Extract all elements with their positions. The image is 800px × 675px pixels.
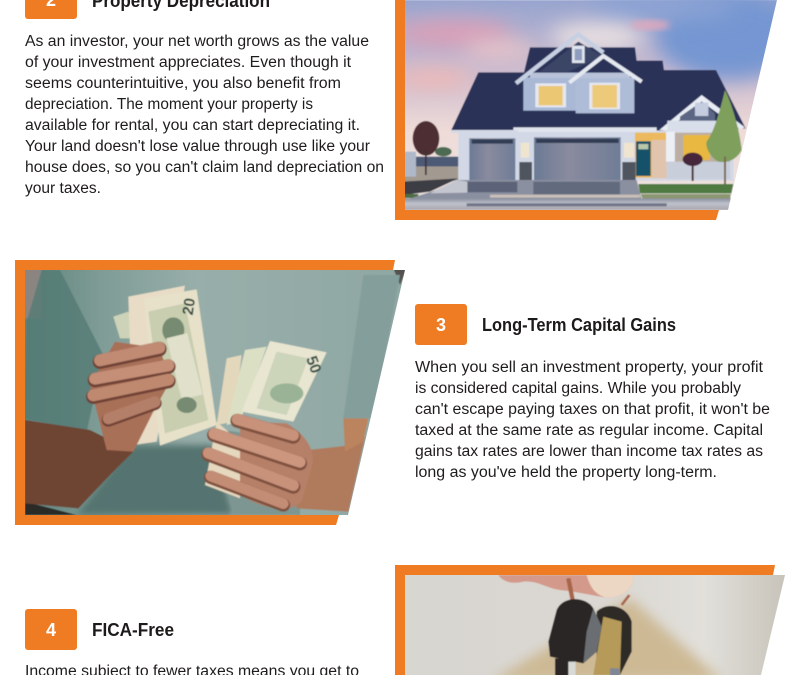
photo: man counting dollar bills: 20: [180, 297, 199, 316]
body text: property depreciation: house does, so you can't claim land depreciation on: [25, 159, 384, 176]
number badge 4: [25, 609, 77, 650]
body text: capital gains: long as you've held the property long-term.: [415, 464, 717, 481]
orange frame: cash photo: [15, 260, 395, 525]
body text: property depreciation: of your investment appreciates. Even though it: [25, 54, 352, 71]
body text: property depreciation: Your land doesn't lose value through use like your: [25, 138, 370, 155]
body text: capital gains: is considered capital gains. While you probably: [415, 380, 741, 397]
number badge 2: [25, 0, 77, 19]
number badge 3: 3: [436, 315, 446, 335]
body text: capital gains: [415, 359, 770, 481]
orange frame: keys photo: [395, 565, 775, 675]
back key: [597, 606, 632, 675]
hand: [498, 575, 604, 598]
main roof: [451, 47, 746, 131]
section 2: property depreciation text: [25, 0, 384, 197]
upper siding: [523, 77, 577, 111]
orange frame: house photo: [395, 0, 719, 220]
photo: suburban house: [393, 0, 800, 213]
driveway: [405, 180, 642, 200]
left bills: [113, 311, 130, 339]
lawn: [638, 184, 733, 193]
body text: property depreciation: As an investor, your net worth grows as the value: [25, 33, 369, 50]
section 4: FICA-free text: [25, 609, 359, 675]
porch: [659, 95, 745, 131]
number badge 4: 4: [46, 620, 56, 640]
number badge 3: [415, 304, 467, 345]
garage doors: [469, 138, 515, 180]
heading: FICA-Free: FICA-Free: [92, 620, 174, 640]
body text: capital gains: When you sell an investment property, your profit: [415, 359, 764, 376]
front door: [636, 141, 651, 176]
lower wall: [458, 131, 733, 181]
body text: capital gains: can't escape paying taxes on that profit, it won't be: [415, 401, 770, 418]
body text: property depreciation: your taxes.: [25, 180, 101, 197]
tree: [706, 90, 742, 162]
photo panel: house keys: [395, 565, 790, 675]
body text: property depreciation: depreciation. The moment your property is: [25, 96, 313, 113]
section 3: long-term capital gains text: [415, 304, 770, 481]
body text: capital gains: gains tax rates are lower than income tax rates as: [415, 443, 763, 460]
road: [403, 198, 737, 210]
right arm: [293, 437, 365, 512]
photo: man counting dollar bills: 50: [302, 354, 324, 376]
heading: Long-Term Capital Gains: Long-Term Capital Gains: [482, 315, 676, 335]
body text: property depreciation: available for rental, you can start depreciating it.: [25, 117, 360, 134]
gable trims: [516, 34, 603, 83]
upper windows: [535, 83, 566, 107]
key ring: [568, 578, 575, 612]
photo panel: house at dusk: [393, 0, 800, 220]
photo panel: hands holding cash: [15, 260, 410, 525]
body text: property depreciation: seems counterintuitive, you also benefit from: [25, 75, 341, 92]
lower shirt shade: [77, 445, 233, 515]
right bills: [217, 355, 242, 425]
left hand: [90, 342, 170, 452]
left arm: [25, 420, 133, 508]
body text: property depreciation: [25, 33, 384, 197]
front key: [548, 599, 602, 663]
photo: man counting dollar bills: [23, 268, 410, 517]
body text: capital gains: taxed at the same rate as regular income. Capital: [415, 422, 763, 439]
right hand: [208, 419, 313, 509]
photo: hand holding keys: [403, 573, 790, 675]
